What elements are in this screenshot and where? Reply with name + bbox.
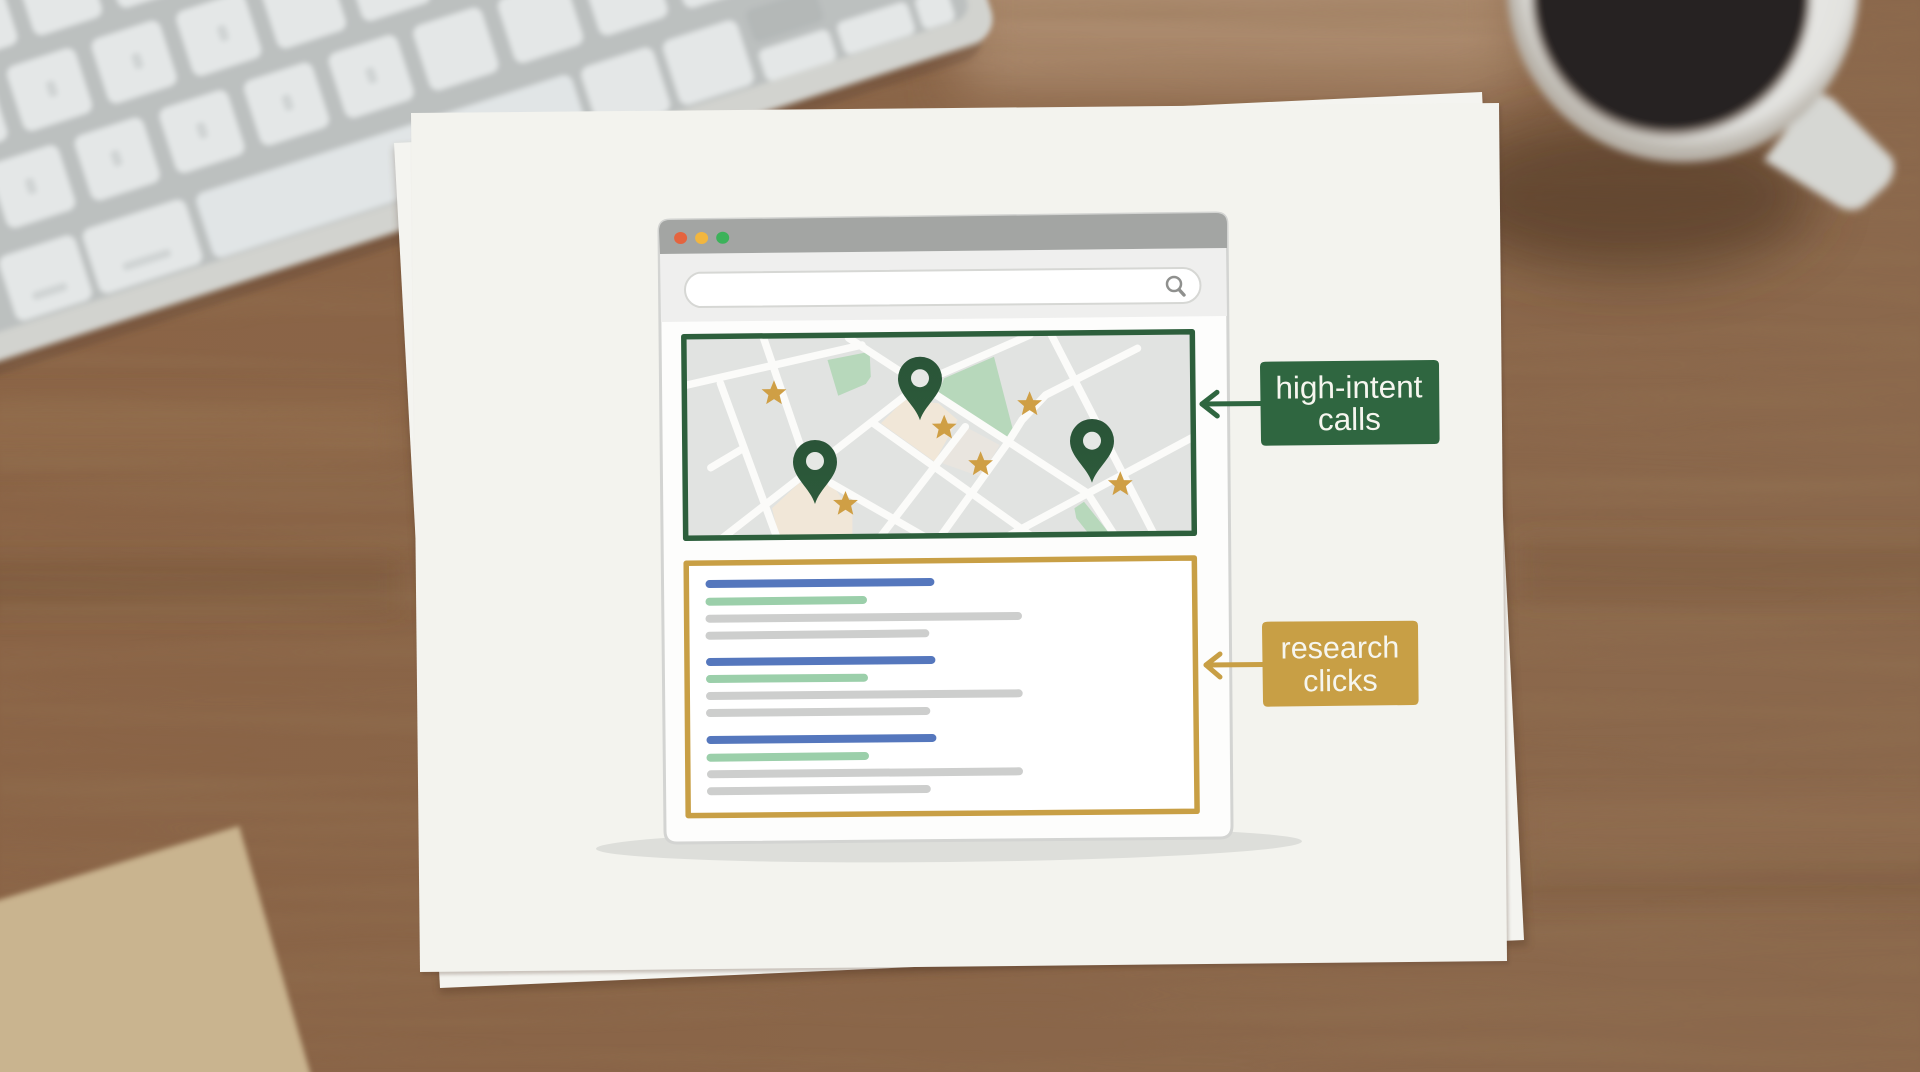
- arrow: high-intent calls: [1202, 392, 1262, 416]
- map pins: [793, 357, 1114, 504]
- map frame: [684, 332, 1194, 538]
- tan blocks: [772, 400, 958, 534]
- callout: research clicks: research: [1280, 630, 1399, 666]
- title bar: [659, 213, 1227, 254]
- back sheet: [394, 92, 1528, 994]
- callout: high-intent calls: high-intent: [1275, 368, 1423, 406]
- callout: high-intent calls: [1260, 360, 1440, 446]
- green parks: [828, 352, 1111, 535]
- row 2: [0, 74, 10, 161]
- callout: research clicks: [1262, 621, 1419, 707]
- window body: [659, 213, 1232, 843]
- sticky note: [0, 826, 318, 1072]
- result 1: [710, 582, 1018, 636]
- callout: high-intent calls: calls: [1318, 401, 1381, 437]
- coffee mug shadow: [1445, 115, 1815, 275]
- row 0: [0, 233, 94, 323]
- browser window: [659, 213, 1232, 843]
- result 2: [710, 660, 1019, 713]
- front sheet: [411, 103, 1509, 975]
- stars: [762, 380, 1133, 515]
- keyboard: [0, 0, 1004, 436]
- map panel: [680, 328, 1200, 543]
- results frame: [686, 558, 1197, 816]
- coffee mug: [1507, 0, 1894, 210]
- results panel: [686, 558, 1197, 816]
- window controls: [674, 232, 729, 244]
- search bar: [685, 268, 1200, 307]
- toolbar: [660, 248, 1227, 322]
- key legends as soft marks: [0, 0, 410, 301]
- browser ground shadow: [596, 824, 1302, 866]
- callout: research clicks: clicks: [1303, 664, 1378, 698]
- result 3: [710, 738, 1019, 791]
- arrow: research clicks: [1206, 654, 1264, 677]
- icon: search: [1167, 277, 1184, 295]
- roads: [685, 335, 1195, 540]
- paper stack: [394, 92, 1528, 994]
